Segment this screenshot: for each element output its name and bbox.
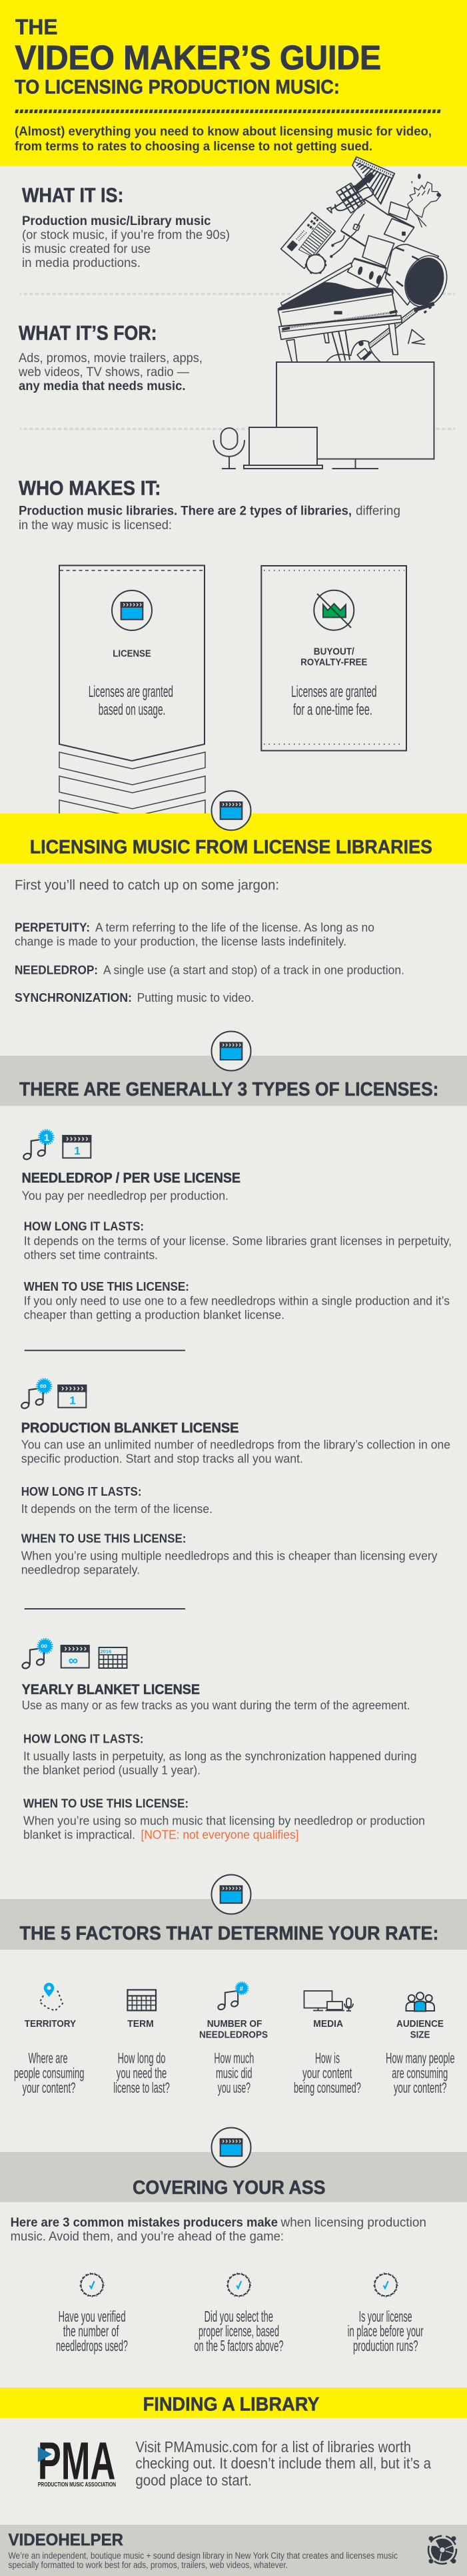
- text block: common mistakes intro: when licensing production: [280, 2215, 426, 2230]
- factor: term: license to last?: [113, 2079, 170, 2096]
- panel: yearly blanket license: [21, 1639, 425, 1841]
- text block: jargon definitions: NEEDLEDROP:: [15, 963, 98, 977]
- footer brand: VIDEOHELPER: [8, 2531, 123, 2549]
- text block: who makes it: in the way music is licensed:: [19, 519, 172, 533]
- logo: PMA: [38, 2431, 116, 2491]
- factor: territory: people consuming: [14, 2065, 85, 2081]
- footer description: specially formatted to work best for ads, promos, trailers, web videos, whatever.: [8, 2560, 288, 2570]
- text block: what it's for: [18, 322, 203, 393]
- icon: clapperboard: [212, 1874, 250, 1914]
- icon: clapperboard: [212, 791, 250, 830]
- factor: audience size: AUDIENCE: [396, 2018, 444, 2030]
- text block: what it is: in media productions.: [22, 256, 141, 270]
- checklist item 1: Have you verified: [59, 2308, 126, 2325]
- icon: check badge: [80, 2273, 104, 2297]
- icon: note with infinity: [21, 1379, 51, 1409]
- factor: media: [294, 1991, 361, 2096]
- factor: media: your content: [302, 2065, 352, 2081]
- logo: videohelper reel: [428, 2536, 456, 2564]
- icon: electric guitar: [326, 304, 434, 362]
- icon: trumpet: [327, 172, 374, 213]
- section banner: 3 types of licenses: [0, 1032, 467, 1106]
- icon: clapperboard: [212, 2127, 250, 2167]
- checklist item 2: on the 5 factors above?: [194, 2337, 284, 2354]
- text block: visit PMA: [135, 2438, 431, 2489]
- icon: midi keyboard controller: [281, 212, 335, 268]
- icon: clapper with one: 1: [69, 1394, 76, 1407]
- factor: number of needledrops: NEEDLEDROPS: [199, 2029, 268, 2040]
- icon: clapper with infinity: [61, 1645, 90, 1668]
- factor: term: TERM: [127, 2018, 154, 2030]
- heading: YEARLY BLANKET LICENSE: [22, 1682, 200, 1697]
- how long it lasts: [21, 1485, 213, 1516]
- description: license: based on usage.: [99, 701, 165, 719]
- description: [21, 1437, 450, 1466]
- text block: what it is: [22, 183, 230, 270]
- label: buyout: [300, 646, 367, 668]
- factor: audience size: [386, 1992, 455, 2096]
- icon: clapperboard: [212, 1032, 250, 1070]
- factor: term: you need the: [117, 2065, 167, 2081]
- footer description: We’re an independent, boutique music + sound design library in New York City that creates and licenses music: [8, 2551, 398, 2561]
- illustration: pile of instruments on monitor: [278, 157, 454, 362]
- icon: note with number one: [23, 1130, 53, 1160]
- text block: jargon definitions: A term referring to the life of the license. As long as no: [95, 920, 374, 935]
- how long it lasts: It depends on the terms of your license. Some libraries grant licenses in perpetuity,: [24, 1233, 452, 1247]
- when to use: [21, 1532, 438, 1576]
- heading: THERE ARE GENERALLY 3 TYPES OF LICENSES:: [19, 1079, 438, 1100]
- when to use: blanket is impractical.: [23, 1828, 135, 1841]
- panel: needledrop license: [22, 1130, 452, 1321]
- description: buyout: Licenses are granted: [291, 683, 377, 701]
- factor: media: MEDIA: [313, 2018, 343, 2030]
- panel: production blanket license: [21, 1379, 450, 1576]
- text block: jargon definitions: PERPETUITY:: [15, 920, 90, 935]
- icon: microphone: [213, 428, 244, 469]
- how long it lasts: It depends on the term of the license.: [21, 1502, 213, 1516]
- footer: [0, 2525, 467, 2576]
- checklist item 1: the number of: [63, 2322, 119, 2340]
- text block: visit PMA: good place to start.: [135, 2471, 252, 2489]
- text block: what it's for: any media that needs music.: [19, 379, 185, 393]
- how long it lasts: It usually lasts in perpetuity, as long as the synchronization happened during: [23, 1749, 417, 1763]
- checklist item 1: needledrops used?: [56, 2337, 128, 2354]
- icon: pan flute: [352, 157, 394, 204]
- text block: who makes it: [19, 476, 400, 533]
- logo: PMA: PMA: [38, 2431, 115, 2491]
- icon: calendar: [127, 1990, 156, 2010]
- text block: who makes it: differing: [356, 505, 400, 518]
- text block: common mistakes intro: music. Avoid them, and you’re ahead of the game:: [11, 2229, 284, 2244]
- title: TO LICENSING PRODUCTION MUSIC:: [15, 77, 340, 99]
- when to use: When you’re using so much music that licensing by needledrop or production: [23, 1813, 425, 1827]
- how long it lasts: HOW LONG IT LASTS:: [24, 1219, 144, 1233]
- title: VIDEO MAKER’S GUIDE: [15, 39, 381, 77]
- icon: drum kit: [348, 202, 454, 313]
- icon: yearly calendar: [99, 1647, 127, 1668]
- text block: jargon definitions: SYNCHRONIZATION:: [15, 990, 132, 1004]
- when to use: needledrop separately.: [21, 1563, 140, 1576]
- text block: what it is: Production music/Library music: [22, 214, 211, 228]
- text block: what it's for: Ads, promos, movie trailers, apps,: [19, 351, 203, 365]
- description: buyout: for a one-time fee.: [293, 701, 372, 719]
- text block: what it is: (or stock music, if you’re from the 90s): [22, 228, 230, 242]
- description: buyout: [291, 683, 377, 719]
- description: specific production. Start and stop tracks all you want.: [21, 1451, 303, 1466]
- factor: media: How is: [315, 2050, 340, 2066]
- description: Use as many or as few tracks as you want during the term of the agreement.: [22, 1698, 410, 1712]
- label: license: LICENSE: [113, 648, 151, 660]
- text block: visit PMA: Visit PMAmusic.com for a list of libraries worth: [135, 2438, 411, 2456]
- icon: check badge: [227, 2273, 250, 2297]
- heading: who makes it: WHO MAKES IT:: [19, 476, 161, 499]
- heading: NEEDLEDROP / PER USE LICENSE: [22, 1171, 240, 1186]
- icon: clapper with one: [62, 1135, 91, 1158]
- heading: PRODUCTION BLANKET LICENSE: [21, 1420, 238, 1436]
- description: You pay per needledrop per production.: [22, 1188, 229, 1202]
- description: license: [89, 683, 173, 719]
- footer description: [8, 2551, 398, 2570]
- when to use: [23, 1797, 425, 1841]
- text block: jargon intro: First you’ll need to catch up on some jargon:: [15, 877, 279, 893]
- section banner: licensing music from license libraries: [0, 791, 467, 864]
- when to use: [24, 1280, 450, 1321]
- factor: number of needledrops: you use?: [218, 2079, 250, 2096]
- chevron bands: [59, 752, 205, 817]
- text block: what it is: is music created for use: [22, 242, 151, 256]
- factor: number of needledrops: [199, 1982, 268, 2096]
- description: You can use an unlimited number of needledrops from the library’s collection in one: [21, 1437, 450, 1451]
- text block: common mistakes intro: [11, 2215, 426, 2244]
- factor: territory: your content?: [23, 2079, 76, 2096]
- factor: term: How long do: [118, 2050, 165, 2066]
- icon: note with hash: [217, 1982, 248, 2010]
- section banner: covering your ass: [0, 2127, 467, 2202]
- icon: small triangle pick: [408, 329, 425, 344]
- factor: audience size: SIZE: [410, 2029, 430, 2040]
- checklist item 2: [194, 2273, 284, 2354]
- icon: drum stands and cables: [330, 200, 388, 258]
- icon: clapper with one: 1: [74, 1145, 81, 1157]
- how long it lasts: HOW LONG IT LASTS:: [23, 1733, 144, 1746]
- when to use: cheaper than getting a production blanket license.: [24, 1307, 284, 1321]
- when to use: When you’re using multiple needledrops and this is cheaper than licensing every: [21, 1548, 438, 1562]
- icon: crossed-out crown: [314, 590, 354, 630]
- how long it lasts: the blanket period (usually 1 year).: [23, 1763, 201, 1777]
- checklist item 1: [56, 2273, 128, 2354]
- text block: visit PMA: checking out. It doesn’t include them all, but it’s a: [135, 2455, 431, 2472]
- factor: territory: TERRITORY: [25, 2018, 76, 2030]
- checklist item 3: production runs?: [353, 2337, 418, 2354]
- subtitle: from terms to rates to choosing a license to not getting sued.: [15, 140, 372, 154]
- note in orange: [NOTE: not everyone qualifies]: [141, 1828, 298, 1841]
- icon: note with hash: #: [240, 1986, 244, 1993]
- text block: jargon definitions: Putting music to video.: [137, 990, 254, 1004]
- when to use: WHEN TO USE THIS LICENSE:: [23, 1797, 189, 1811]
- text block: common mistakes intro: Here are 3 common mistakes producers make: [11, 2215, 278, 2230]
- how long it lasts: [23, 1733, 417, 1777]
- heading: what it's for: WHAT IT’S FOR:: [19, 322, 157, 345]
- label: buyout: ROYALTY-FREE: [300, 656, 367, 668]
- how long it lasts: [24, 1219, 452, 1262]
- when to use: WHEN TO USE THIS LICENSE:: [21, 1532, 187, 1546]
- factor: territory: Where are: [28, 2050, 68, 2066]
- heading: THE 5 FACTORS THAT DETERMINE YOUR RATE:: [20, 1923, 438, 1944]
- icon: three people: [406, 1992, 434, 2012]
- icon: clapper with one: [57, 1385, 87, 1408]
- text block: jargon definitions: change is made to your production, the license lasts indefinitely.: [15, 935, 346, 949]
- text block: who makes it: Production music libraries. There are 2 types of libraries,: [19, 505, 352, 518]
- heading: what it is: WHAT IT IS:: [22, 183, 124, 206]
- checklist item 2: Did you select the: [205, 2308, 273, 2325]
- factor: number of needledrops: NUMBER OF: [207, 2018, 262, 2030]
- icon: laptop: [244, 427, 322, 469]
- checklist item 3: [348, 2273, 424, 2354]
- icon: yearly calendar: 2016: [100, 1648, 111, 1655]
- checklist item 2: proper license, based: [199, 2322, 279, 2340]
- label: buyout: BUYOUT/: [314, 646, 355, 657]
- icon: note with number one: 1: [44, 1132, 49, 1144]
- section banner: finding a library: [0, 2388, 467, 2418]
- icon: check badge: [374, 2273, 398, 2297]
- icon: note with infinity: ∞: [41, 1640, 47, 1651]
- panel: license library pennant: [59, 566, 205, 817]
- icon: tambourine: [306, 254, 326, 274]
- icon: clawed hand: [408, 174, 441, 228]
- panel: buyout / royalty-free card: [261, 566, 406, 751]
- section banner: 5 factors: [0, 1874, 467, 1950]
- when to use: WHEN TO USE THIS LICENSE:: [24, 1280, 189, 1293]
- text block: what it's for: web videos, TV shows, radio —: [18, 365, 189, 379]
- icon: clapperboard: [112, 590, 152, 630]
- subtitle: [15, 124, 432, 154]
- factor: media: being consumed?: [294, 2079, 361, 2096]
- icon: monitor: [276, 362, 434, 469]
- title: [15, 15, 381, 99]
- heading: COVERING YOUR ASS: [133, 2177, 326, 2199]
- factor: term: [113, 1990, 170, 2096]
- icon: map pin with dotted loop: [40, 1983, 63, 2011]
- icon: note with infinity: ∞: [40, 1380, 47, 1391]
- title: THE: [15, 15, 57, 39]
- icon: monitor laptop microphone: [304, 1991, 353, 2011]
- icon: note with infinity: [21, 1639, 52, 1669]
- header panel: [0, 0, 467, 166]
- checklist item 3: Is your license: [359, 2308, 412, 2325]
- factor: number of needledrops: music did: [216, 2065, 252, 2081]
- how long it lasts: HOW LONG IT LASTS:: [21, 1485, 142, 1498]
- factor: number of needledrops: How much: [214, 2050, 254, 2066]
- when to use: If you only need to use one to a few needledrops within a single production and it’s: [24, 1293, 450, 1307]
- factor: territory: [14, 1983, 85, 2096]
- text block: jargon definitions: [15, 920, 404, 1004]
- icon: grand piano: [278, 263, 402, 362]
- how long it lasts: others set time contraints.: [24, 1247, 158, 1262]
- subtitle: (Almost) everything you need to know about licensing music for video,: [15, 124, 432, 138]
- text block: jargon definitions: A single use (a start and stop) of a track in one production.: [103, 963, 404, 977]
- heading: LICENSING MUSIC FROM LICENSE LIBRARIES: [30, 837, 432, 858]
- icon: clapper with infinity: ∞: [69, 1653, 78, 1668]
- description: license: Licenses are granted: [89, 683, 173, 701]
- heading: FINDING A LIBRARY: [143, 2394, 320, 2416]
- logo: PMA: PRODUCTION MUSIC ASSOCIATION: [38, 2481, 116, 2489]
